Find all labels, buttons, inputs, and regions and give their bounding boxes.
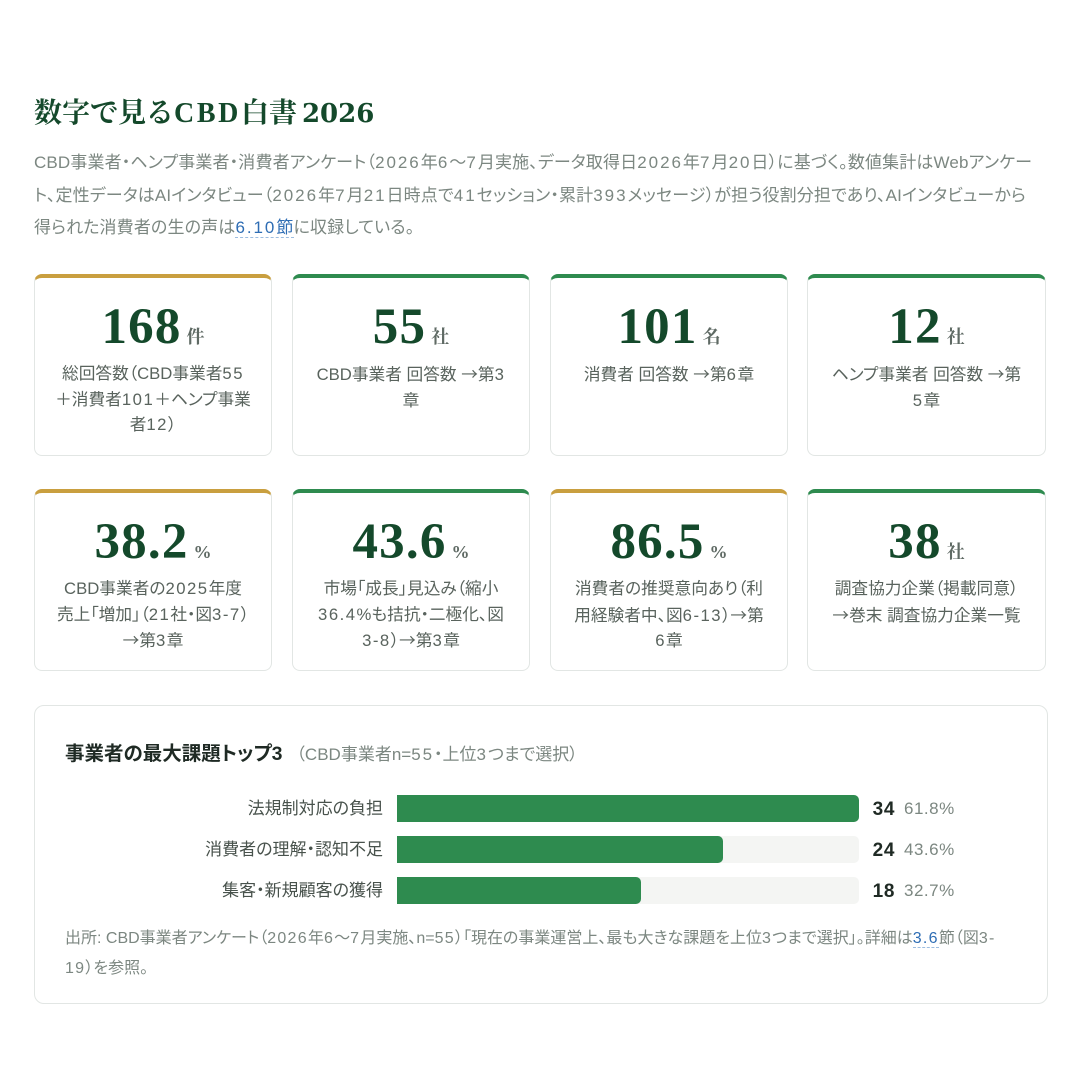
bar row: 消費者の理解・認知不足: 消費者の理解・認知不足 bbox=[205, 840, 383, 859]
stat card: 43.6%: 36.4%も拮抗・二極化、図 bbox=[318, 604, 504, 624]
stat card: 38社 bbox=[807, 489, 1046, 671]
bar row: 集客・新規顧客の獲得: 32.7% bbox=[904, 881, 955, 900]
stat card: 38社: 調査協力企業（掲載同意） bbox=[835, 579, 1018, 598]
stat card: 38.2%: →第3章 bbox=[123, 627, 183, 651]
stat card: 55社: 章 bbox=[403, 390, 419, 410]
stat card: 38社: →巻末 調査協力企業一覧 bbox=[832, 602, 1021, 626]
bar row: 消費者の理解・認知不足: 24 bbox=[873, 840, 895, 861]
source note: 出所: CBD事業者アンケート（2026年6〜7月実施、n=55）「現在の事業運営上、最も大きな課題を上位3つまで選択」。詳細は3.6節（図3- bbox=[65, 930, 994, 947]
bar row: 集客・新規顧客の獲得: 集客・新規顧客の獲得 bbox=[222, 881, 383, 900]
intro text: ト、定性データはAIインタビュー（2026年7月21日時点で41セッション・累計393メッセージ）が担う役割分担であり、AIインタビューから bbox=[34, 186, 1026, 204]
bar row: 消費者の理解・認知不足: 43.6% bbox=[904, 840, 955, 859]
bar row: 法規制対応の負担 bbox=[248, 795, 955, 822]
intro text bbox=[34, 153, 1032, 238]
intro text: CBD事業者・ヘンプ事業者・消費者アンケート（2026年6〜7月実施、データ取得日2026年7月20日）に基づく。数値集計はWebアンケー bbox=[34, 153, 1032, 172]
stat card: 38社: 38 社 bbox=[888, 514, 965, 570]
stat card: 168件: 者12） bbox=[130, 415, 176, 434]
source note: 19）を参照。 bbox=[65, 960, 148, 976]
stat card: 43.6%: 43.6 % bbox=[352, 514, 470, 570]
chart heading: 事業者の最大課題トップ3 （CBD事業者n=55・上位3つまで選択） bbox=[65, 743, 578, 765]
stat card: 12社: ヘンプ事業者 回答数 →第 bbox=[832, 361, 1021, 385]
bar row: 消費者の理解・認知不足 bbox=[205, 836, 955, 863]
stat card: 12社 bbox=[807, 274, 1046, 456]
title: 数字で見るCBD白書2026 bbox=[34, 98, 374, 129]
bar row: 法規制対応の負担: 34 bbox=[873, 799, 895, 820]
stat card: 43.6%: 3-8）→第3章 bbox=[362, 627, 460, 651]
intro text: 得られた消費者の生の声は6.10節に収録している。 bbox=[34, 218, 414, 237]
stat card: 12社: 5章 bbox=[913, 390, 940, 410]
stat card: 55社: 55 社 bbox=[373, 299, 449, 355]
panel: top 3 challenges chart bbox=[34, 705, 1048, 1004]
bar row: 法規制対応の負担: 法規制対応の負担 bbox=[248, 799, 383, 818]
stat card: 38.2% bbox=[34, 489, 272, 671]
bar row: 法規制対応の負担: 61.8% bbox=[904, 799, 955, 818]
stat card: 101名: 101 名 bbox=[617, 299, 721, 355]
stat card: 168件: 総回答数（CBD事業者55 bbox=[62, 364, 244, 383]
stat card: 86.5% bbox=[550, 489, 788, 671]
stat card: 86.5%: 用経験者中、図6-13）→第 bbox=[574, 602, 764, 626]
stat card: 101名 bbox=[550, 274, 788, 456]
bar row: 集客・新規顧客の獲得: 18 bbox=[873, 881, 895, 902]
stat card: 38.2%: CBD事業者の2025年度 bbox=[64, 579, 242, 598]
bar row: 集客・新規顧客の獲得 bbox=[222, 877, 955, 904]
stat card: 86.5%: 6章 bbox=[655, 631, 683, 650]
stat card: 55社 bbox=[292, 274, 530, 456]
stat card: 12社: 12 社 bbox=[888, 299, 965, 355]
stat card: 168件: 168 件 bbox=[101, 299, 205, 355]
stat card: 43.6%: 市場「成長」見込み（縮小 bbox=[324, 579, 498, 598]
source note bbox=[65, 929, 994, 976]
stat card: 55社: CBD事業者 回答数 →第3 bbox=[317, 361, 505, 385]
stat card: 86.5%: 消費者の推奨意向あり（利 bbox=[575, 579, 763, 598]
stat card: 86.5%: 86.5 % bbox=[610, 514, 728, 570]
stat card: 43.6% bbox=[292, 489, 530, 671]
stat card: 168件 bbox=[34, 274, 272, 456]
stat card: 38.2%: 38.2 % bbox=[94, 514, 212, 570]
stat card: 101名: 消費者 回答数 →第6章 bbox=[584, 361, 754, 385]
stat card: 38.2%: 売上「増加」（21社・図3-7） bbox=[57, 604, 249, 624]
stat card: 168件: ＋消費者101＋ヘンプ事業 bbox=[55, 390, 251, 408]
